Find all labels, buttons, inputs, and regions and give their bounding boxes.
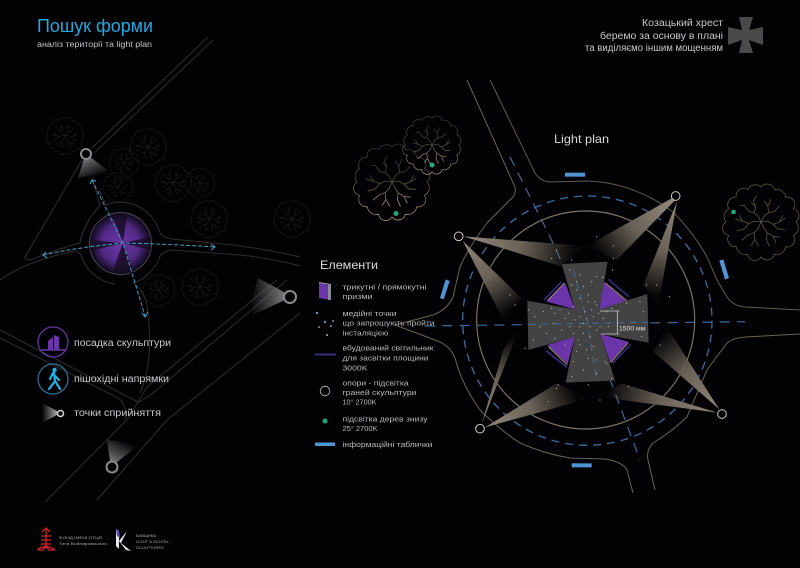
viewpoint top (78, 149, 110, 178)
studio name: КАВШИКА (136, 534, 157, 538)
icon: embedded light (315, 354, 336, 356)
icon: info sign (315, 442, 335, 446)
cross explanation text: та виділяємо іншим мощенням (585, 43, 723, 54)
direction arrowheads (43, 180, 215, 317)
foundation name (59, 536, 107, 546)
inner ring (477, 211, 695, 429)
logo: kavshyka (116, 529, 169, 551)
information signs (440, 173, 729, 467)
title: Пошук форми (37, 16, 153, 36)
label: poles: граней скульптури (342, 388, 416, 397)
label: embedded light: вбудований світильник (342, 344, 434, 352)
viewpoint bottom (106, 440, 141, 472)
left legend (38, 327, 171, 423)
studio name: LIGHT & DIGITAL (136, 540, 169, 544)
foundation name: ФОНД ІМЕНІ ОТЦЯ (59, 536, 102, 540)
label: media points: медійні точки (342, 309, 396, 318)
tree right (722, 184, 799, 261)
embedded linear lights (544, 279, 631, 367)
label: tree uplight: підсвітка дерев знизу (342, 414, 428, 424)
site analysis map (0, 37, 310, 502)
cross explanation text (585, 18, 723, 54)
logo: foundation (38, 528, 107, 550)
label: sculpture placement: посадка скульптури (74, 338, 171, 349)
icon: K mark (116, 529, 131, 551)
dashed axes (425, 157, 745, 460)
icon: sculpture placement (38, 327, 68, 357)
left map trees (46, 118, 310, 306)
subtitle: аналіз території та light plan (37, 40, 152, 49)
tan prism edges (547, 283, 628, 365)
label: embedded light: для засвітки площини (342, 354, 428, 362)
label: poles: опори - підсвітка (342, 378, 409, 388)
tree large (353, 144, 430, 221)
studio name: SCULPTURES (136, 546, 165, 550)
icon: pole (320, 386, 330, 396)
light beams (463, 198, 719, 427)
left map roads (0, 37, 300, 502)
icon: viewpoint (42, 403, 64, 423)
label: tree uplight (342, 414, 428, 433)
tree medium (403, 116, 461, 174)
icon: pedestrian (38, 364, 68, 394)
label: prisms: трикутні / прямокутні (342, 282, 427, 292)
icon: media points (316, 312, 334, 336)
icon: prism (319, 282, 331, 300)
dimension label: 1500 мм (619, 325, 646, 332)
dashed ring (463, 196, 712, 445)
label: info signs: інформаційні таблички (342, 440, 432, 449)
label: pedestrian directions: пішохідні напрямки (74, 374, 169, 385)
light plan heading: Light plan (554, 132, 609, 146)
cross explanation text: Козацький хрест (642, 18, 723, 29)
pedestrian directions (43, 180, 215, 316)
cross explanation text: беремо за основу в плані (600, 30, 723, 42)
cossack cross plan (527, 262, 649, 383)
sculpture site with purple glow (90, 212, 152, 274)
foundation name: Тита Войнаровського (59, 542, 107, 546)
elements legend (315, 282, 434, 449)
icon: cossack cross (728, 17, 763, 53)
label: media points (342, 309, 434, 338)
trees with uplighting (353, 116, 799, 261)
label: embedded light (342, 344, 434, 372)
label: embedded light: 3000K (342, 364, 368, 372)
label: poles: 10° 2700K (342, 398, 377, 406)
studio name (136, 534, 169, 550)
light poles (454, 192, 726, 433)
light plan drawing (425, 157, 745, 467)
label: viewpoints: точки сприйняття (74, 408, 161, 419)
media points (510, 237, 669, 402)
icon: tree uplight (322, 418, 328, 424)
label: poles (342, 378, 416, 406)
icon: red emblem (38, 528, 54, 550)
elements heading: Елементи (320, 258, 378, 272)
label: tree uplight: 25° 2700K (342, 424, 378, 433)
dimension line (600, 311, 619, 334)
label: media points: інсталяцією (342, 328, 389, 338)
label: prisms: призми (342, 292, 372, 301)
label: prisms (342, 282, 427, 301)
axes over cross (528, 270, 648, 380)
label: media points: що запрошують пройти (342, 318, 434, 328)
plaza roads (395, 80, 800, 493)
viewpoint right (246, 278, 296, 318)
purple prisms (547, 282, 628, 364)
